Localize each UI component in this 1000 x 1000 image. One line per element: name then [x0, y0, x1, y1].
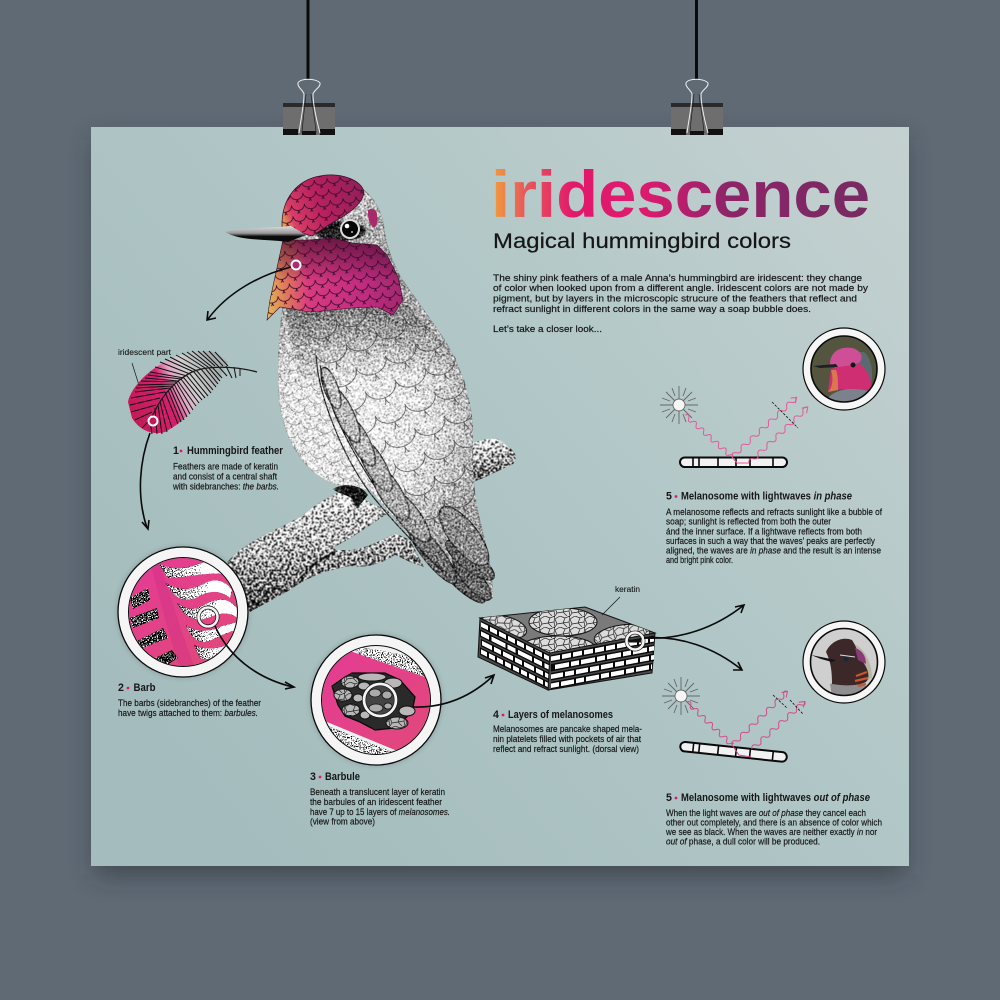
melanosome block	[477, 607, 655, 690]
text: 3 barbule	[310, 771, 450, 826]
text: 2 barb: The barbs (sidebranches) of the feather	[118, 697, 261, 708]
text: 1 hummingbird feather: 1	[173, 445, 179, 457]
circle: barb	[118, 547, 248, 677]
arrow: barb to barbule	[215, 626, 294, 689]
text: 2 barb: have twigs attached to them: barbules.	[118, 707, 258, 718]
melanosome bar top	[680, 457, 787, 467]
text: 5 in phase: aligned, the waves are in phase and the result is an intense	[666, 544, 881, 556]
text: 2 barb	[118, 682, 261, 718]
text: 4 layers of melanosomes: Melanosomes are pancake shaped mela-	[493, 723, 642, 734]
wing and tail feathers	[316, 355, 500, 608]
text: 4 layers of melanosomes	[493, 709, 642, 754]
chest scale lines	[300, 301, 475, 526]
melanosome bar bottom	[680, 741, 787, 763]
hummingbird	[225, 175, 500, 608]
barbule	[332, 673, 415, 730]
text: 5 in phase: A melanosome reflects and refracts sunlight like a bubble of	[666, 506, 882, 517]
crown	[282, 175, 364, 236]
text: 4 layers of melanosomes: 4	[493, 709, 499, 721]
binder clip right	[671, 79, 723, 135]
text: 5 in phase: surfaces in such a way that the waves’ peaks are perfectly	[666, 535, 875, 546]
intro text: of color when looked upon from a different angle. Iridescent colors are not made by	[493, 282, 868, 293]
intro text: refract sunlight in different colors in the same way a soap bubble does.	[493, 303, 811, 314]
text: 5 in phase: and bright pink color.	[666, 554, 733, 565]
subtitle: Magical hummingbird colors	[493, 230, 791, 253]
text: 5 out of phase: other out completely, and there is an absence of color which	[666, 816, 882, 828]
intro text: Let’s take a closer look...	[493, 323, 602, 334]
text: 5 in phase: ánd the inner surface. If a lightwave reflects from both	[666, 526, 862, 536]
text: 3 barbule: the barbules of an iridescent feather	[310, 796, 442, 807]
pink patch behind eye	[368, 209, 378, 227]
text: 5 in phase: soap; sunlight is reflected from both the outer	[666, 516, 831, 526]
photo: hummingbird with dull colors	[803, 621, 885, 703]
text: 1 hummingbird feather	[172, 445, 283, 492]
sun top	[660, 386, 698, 424]
text: 5 out of phase: When the light waves are out of phase they cancel each	[666, 807, 866, 818]
text: 4 layers of melanosomes: nin platelets filled with pockets of air that	[493, 733, 641, 744]
hanging strings	[306, 0, 698, 79]
text: 3 barbule: 3	[310, 771, 316, 783]
lightwaves out of phase	[685, 689, 807, 757]
top face	[480, 607, 655, 653]
text: 1 hummingbird feather: and consist of a central shaft	[173, 470, 277, 482]
label: iridescent part	[118, 347, 172, 398]
text: 2 barb: 2	[118, 682, 124, 694]
text: 3 barbule: Beneath a translucent layer of keratin	[310, 786, 445, 797]
lightwaves in phase	[684, 395, 810, 466]
text: 5 in phase: Melanosome with lightwaves in phase	[681, 490, 852, 502]
intro text: pigment, but by layers in the microscopic strucure of the feathers that reflect and	[493, 292, 857, 304]
text: 4 layers of melanosomes: reflect and refract sunlight. (dorsal view)	[493, 743, 639, 754]
text: 2 barb: Barb	[134, 682, 156, 694]
text: 5 out of phase: we see as black. When the waves are neither exactly in nor	[665, 826, 877, 837]
text: 1 hummingbird feather: Hummingbird feather	[187, 445, 283, 457]
poster shadow	[95, 140, 905, 875]
text: 4 layers of melanosomes: Layers of melanosomes	[508, 709, 613, 721]
branch	[225, 438, 516, 612]
text: 5 out of phase: Melanosome with lightwaves out of phase	[681, 792, 870, 804]
text: 5 out of phase: out of phase, a dull color will be produced.	[666, 836, 820, 846]
eye	[340, 219, 360, 239]
title: iridescence	[491, 157, 870, 231]
left side	[478, 618, 550, 690]
arrow: throat to feather	[207, 267, 291, 320]
text: 3 barbule: Barbule	[325, 771, 360, 783]
wavefront dashed lines bottom	[773, 695, 803, 714]
binder clip left	[283, 79, 335, 135]
belly fine scale lines	[278, 310, 365, 487]
circle: barbule	[311, 635, 441, 766]
arrow: feather to barb	[140, 433, 150, 529]
beak	[225, 226, 306, 242]
label: iridescent part: iridescent part	[118, 347, 172, 357]
text: 1 hummingbird feather: with sidebranches: the barbs.	[172, 480, 279, 492]
intro text	[493, 272, 868, 334]
poster sheet	[91, 127, 909, 866]
label: keratin	[602, 584, 640, 615]
label: keratin: keratin	[615, 584, 640, 594]
intro text: The shiny pink feathers of a male Anna’s hummingbird are iridescent: they change	[493, 272, 862, 283]
marker on throat	[292, 260, 300, 270]
right side	[548, 633, 655, 690]
text: 5 in phase: 5	[666, 490, 672, 502]
text: 3 barbule: (view from above)	[310, 816, 375, 826]
text: 3 barbule: have 7 up to 15 layers of melanosomes.	[310, 806, 450, 817]
sun bottom	[662, 677, 700, 715]
arrow: barbule to melanosome block	[413, 675, 494, 707]
text: 5 out of phase	[665, 792, 882, 846]
forked arrow from block	[644, 605, 744, 670]
text: 1 hummingbird feather: Feathers are made of keratin	[173, 460, 278, 472]
gorget	[267, 238, 403, 320]
text: 5 in phase	[666, 490, 882, 565]
feet	[333, 485, 368, 509]
text: 5 out of phase: 5	[666, 792, 672, 804]
feather	[128, 351, 257, 434]
body stipple	[278, 178, 493, 603]
marker on feather	[148, 416, 158, 426]
photo: hummingbird in bright pink	[803, 328, 885, 410]
selection ring	[626, 632, 644, 650]
wavefront dashed line top	[772, 402, 798, 428]
